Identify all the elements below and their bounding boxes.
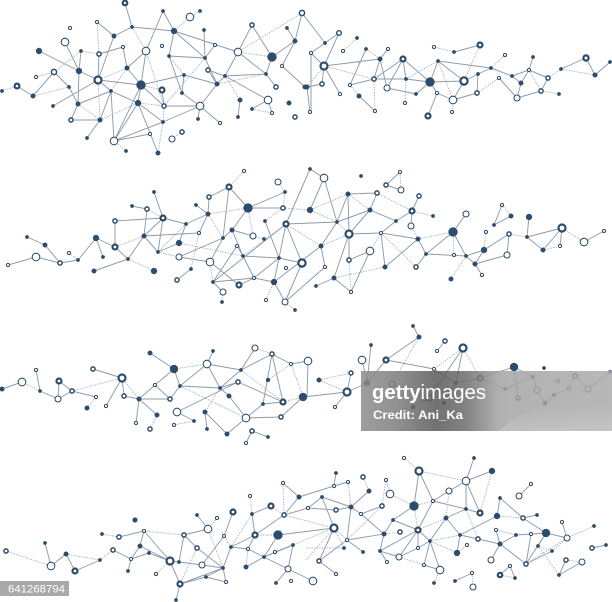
image ID tag: [0, 581, 69, 596]
network 1 solid links: [17, 3, 610, 153]
network 1 nodes: [0, 1, 612, 155]
network 2: second band: [6, 167, 606, 312]
network 4 solid links: [45, 458, 606, 600]
watermark lighter lower shading: [500, 405, 612, 431]
network 3 nodes: [0, 324, 612, 445]
watermark panel: gettyimages credit: [361, 371, 612, 431]
network 3 solid links: [2, 326, 610, 443]
ID number: 641268794: [8, 584, 65, 596]
network 4: bottom band: [4, 456, 608, 602]
watermark credit line: Credit: Ani_Ka: [373, 408, 463, 422]
watermark background: [361, 371, 612, 431]
watermark logotype: gettyimages: [372, 382, 486, 404]
network 1: top band: [0, 1, 612, 155]
network 4 dashed links: [6, 458, 594, 587]
network 3: third band: [0, 324, 612, 445]
network 4 nodes: [4, 456, 608, 602]
network 2 nodes: [6, 167, 606, 312]
network 3 dashed links: [22, 337, 480, 429]
network 2 dashed links: [69, 171, 584, 310]
network 1 dashed links: [2, 11, 595, 153]
network 2 solid links: [8, 169, 604, 302]
ID tag background: [0, 581, 69, 596]
